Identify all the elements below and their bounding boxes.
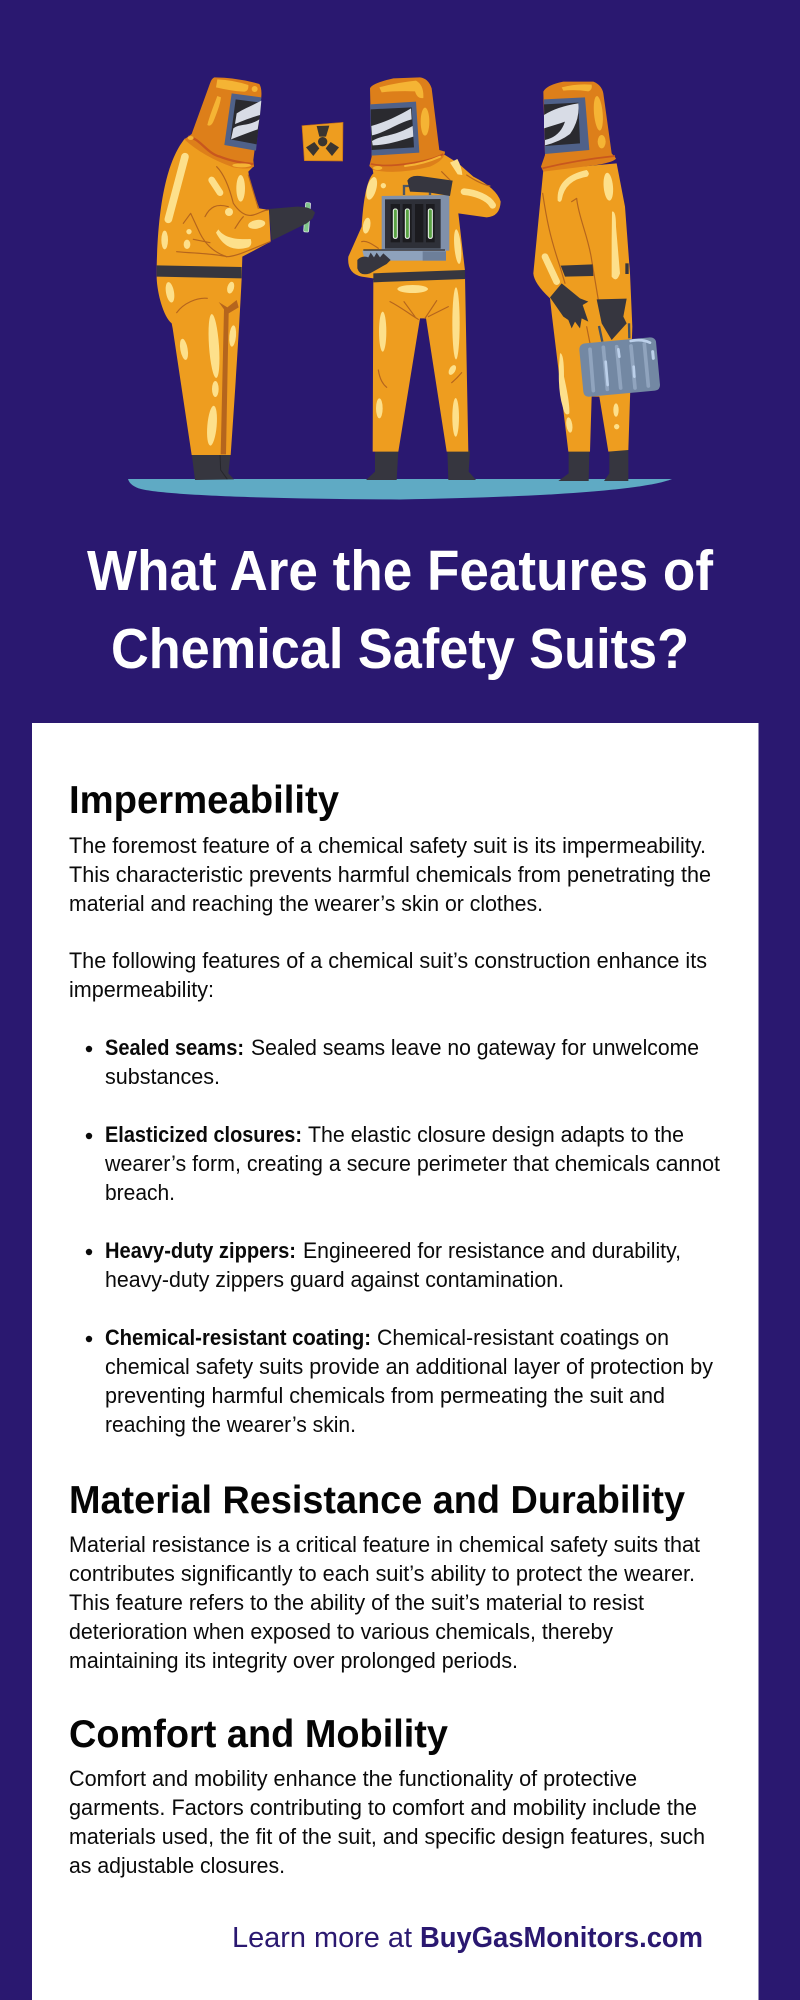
title: Chemical Safety Suits? <box>111 617 689 681</box>
bullet: chemical-resistant coating: preventing harmful chemicals from permeating the suit and <box>105 1383 665 1408</box>
text block: impermeability intro: material and reaching the wearer’s skin or clothes. <box>69 891 543 916</box>
heading: Comfort and Mobility: Comfort and Mobility <box>69 1713 448 1756</box>
heading: Impermeability: Impermeability <box>69 779 339 822</box>
hero illustration: three workers in chemical suits <box>128 77 672 500</box>
figure: left worker holding test tube <box>157 77 315 480</box>
bullet: sealed seams: Sealed seams leave no gateway for unwelcome <box>251 1035 699 1060</box>
text block: material resistance: This feature refers to the ability of the suit’s material to resist <box>69 1590 644 1615</box>
bullet: elasticized closures: The elastic closure design adapts to the <box>308 1122 684 1147</box>
bullet: sealed seams: Sealed seams: <box>105 1035 244 1060</box>
bullet: elasticized closures: Elasticized closures: <box>105 1122 302 1147</box>
ground platform <box>128 479 672 500</box>
text block: construction lead-in <box>69 948 707 1002</box>
bullet: heavy-duty zippers: Heavy-duty zippers: <box>105 1238 296 1263</box>
text block: comfort and mobility: Comfort and mobility enhance the functionality of protective <box>69 1766 637 1791</box>
text block: material resistance: deterioration when exposed to various chemicals, thereby <box>69 1619 613 1644</box>
icon: radiation warning sign <box>302 122 343 161</box>
text block: comfort and mobility: materials used, the fit of the suit, and specific design features, such <box>69 1824 705 1849</box>
text block: material resistance <box>69 1532 700 1673</box>
text block: comfort and mobility: garments. Factors contributing to comfort and mobility include the <box>69 1795 697 1820</box>
bullet: chemical-resistant coating: Chemical-resistant coatings on <box>377 1325 669 1350</box>
bullet: chemical-resistant coating: Chemical-resistant coating: <box>105 1325 371 1350</box>
bullet: sealed seams: substances. <box>105 1064 220 1089</box>
bullet: heavy-duty zippers: heavy-duty zippers guard against contamination. <box>105 1267 564 1292</box>
text block: impermeability intro: This characteristic prevents harmful chemicals from penetrating the <box>69 862 711 887</box>
bullet: sealed seams <box>86 1035 699 1089</box>
footer call to action: BuyGasMonitors.com <box>420 1922 703 1954</box>
figure: middle worker holding sample case <box>348 77 501 480</box>
heading: Material Resistance and Durability: Material Resistance and Durability <box>69 1479 685 1522</box>
bullet: chemical-resistant coating: chemical safety suits provide an additional layer of protection by <box>105 1354 713 1379</box>
text block: impermeability intro: The foremost feature of a chemical safety suit is its impermeability. <box>69 833 706 858</box>
bullet: heavy-duty zippers <box>86 1238 681 1292</box>
toolbox <box>579 323 660 397</box>
text block: material resistance: Material resistance is a critical feature in chemical safety suits that <box>69 1532 700 1557</box>
text block: impermeability intro <box>69 833 711 916</box>
text block: construction lead-in: The following features of a chemical suit’s construction enhance its <box>69 948 707 973</box>
title: What Are the Features of <box>87 539 714 603</box>
footer call to action: Learn more at <box>232 1922 412 1954</box>
text block: construction lead-in: impermeability: <box>69 977 214 1002</box>
bullet: elasticized closures: wearer’s form, creating a secure perimeter that chemicals cannot <box>104 1151 720 1176</box>
text block: material resistance: maintaining its integrity over prolonged periods. <box>69 1648 518 1673</box>
sample case with test tubes <box>362 186 449 261</box>
panel: white content card <box>32 723 758 2000</box>
bullet: chemical-resistant coating: reaching the wearer’s skin. <box>105 1412 356 1437</box>
title <box>87 539 714 681</box>
bullet: elasticized closures: breach. <box>105 1180 175 1205</box>
bullet: heavy-duty zippers: Engineered for resistance and durability, <box>303 1238 681 1263</box>
footer call to action <box>232 1922 703 1954</box>
bullet: elasticized closures <box>86 1122 720 1205</box>
bullet: chemical-resistant coating <box>86 1325 713 1437</box>
text block: comfort and mobility <box>69 1766 705 1878</box>
figure: right worker carrying toolbox <box>533 82 660 481</box>
text block: comfort and mobility: as adjustable closures. <box>69 1853 285 1878</box>
text block: material resistance: contributes significantly to each suit’s ability to protect the wearer. <box>69 1561 695 1586</box>
